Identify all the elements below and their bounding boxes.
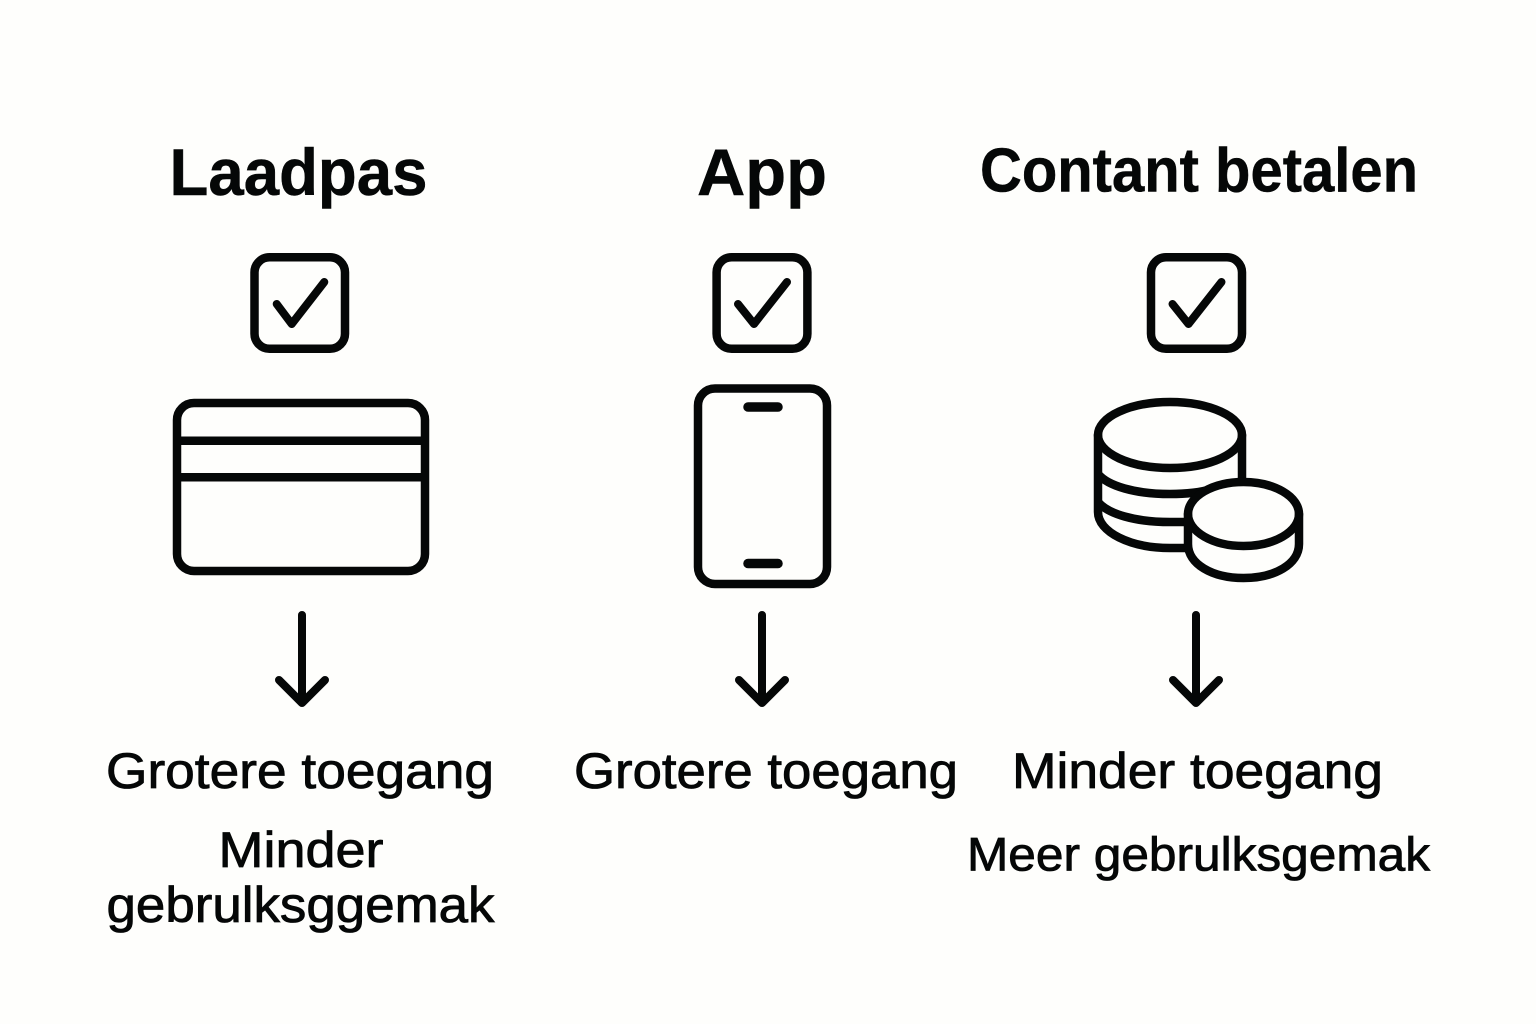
- arrow: [279, 615, 325, 703]
- icon: card: [177, 403, 425, 571]
- icon: checkbox: [1151, 257, 1242, 349]
- heading: Contant betalen: Contant betalen: [980, 136, 1418, 206]
- panel: Laadpas: [106, 135, 496, 933]
- arrow: [739, 615, 785, 703]
- text: Meer gebrulksgemak: Meer gebrulksgemak: [967, 828, 1431, 880]
- icon: phone: [698, 388, 827, 584]
- icon: checkbox: [717, 257, 807, 349]
- text: Grotere toegang: Grotere toegang: [106, 743, 494, 799]
- text: Minder gebrulksggemak: Minder: [218, 822, 384, 878]
- icon: checkbox: [254, 257, 345, 349]
- text: Minder gebrulksggemak: gebrulksggemak: [106, 877, 496, 933]
- heading: App: App: [697, 135, 827, 209]
- text: Minder gebrulksggemak: [106, 822, 496, 933]
- text: Minder toegang: Minder toegang: [1012, 743, 1383, 799]
- heading: Laadpas: Laadpas: [170, 135, 428, 209]
- panel: App: [574, 135, 958, 799]
- icon: coins: [1098, 402, 1299, 578]
- panel: Contant betalen: [967, 136, 1431, 880]
- text: Grotere toegang: Grotere toegang: [574, 743, 958, 799]
- arrow: [1173, 615, 1219, 703]
